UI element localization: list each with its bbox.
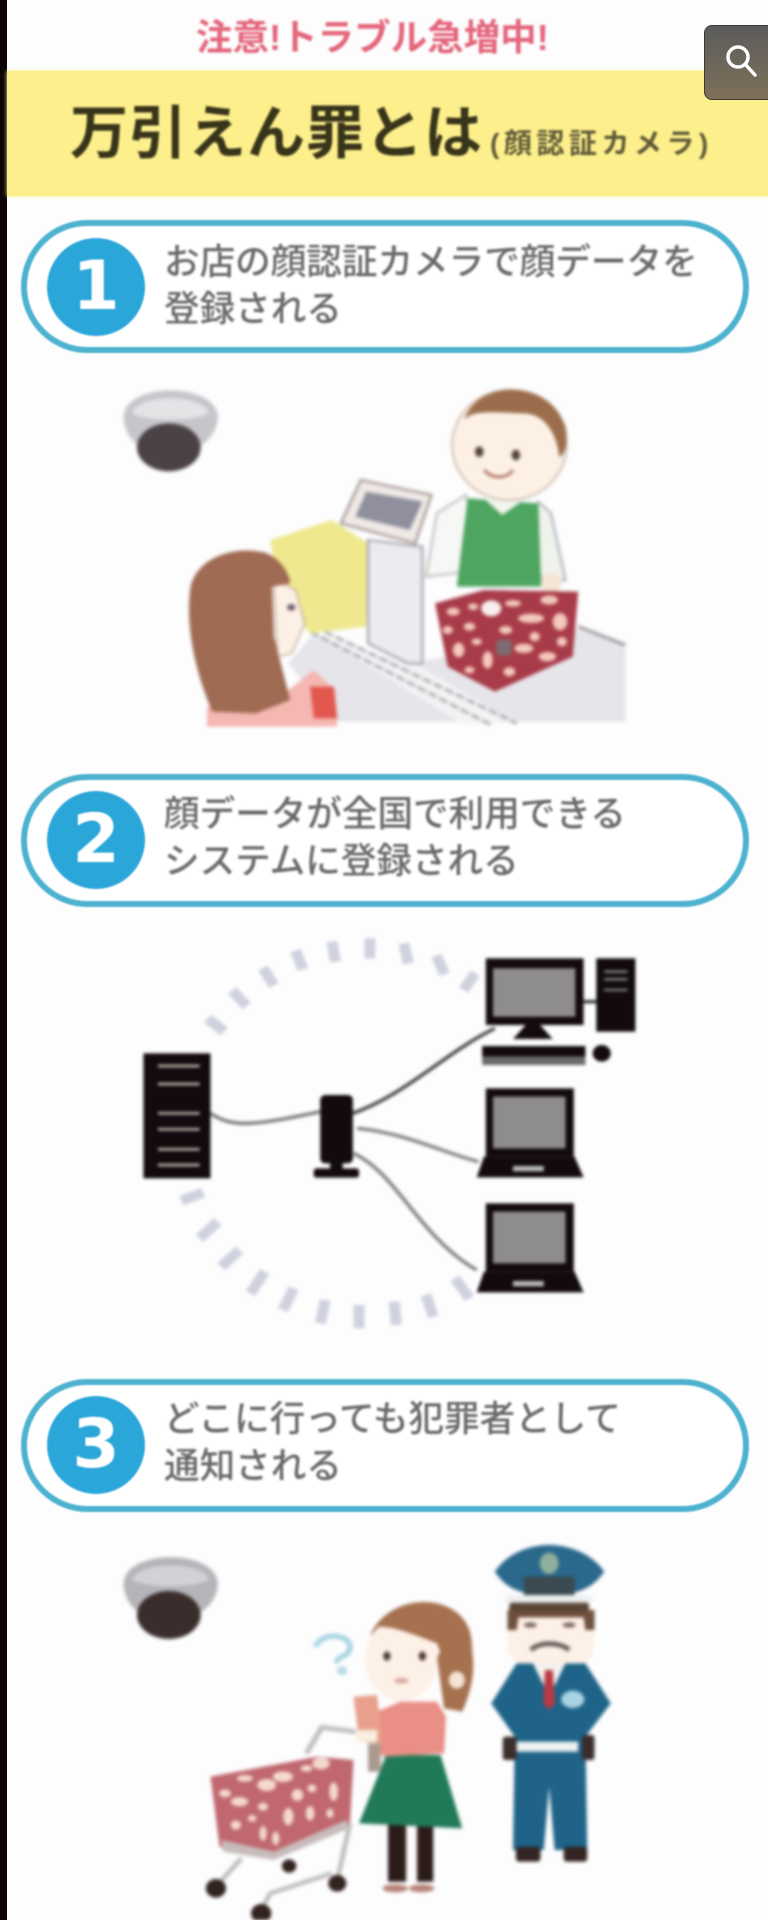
laptop top [477, 1088, 584, 1177]
red kicker heading: 注意!トラブル急増中! [196, 17, 549, 58]
question mark [316, 1636, 350, 1672]
icon: dome camera [124, 1557, 218, 1639]
number badge 3: 3 [72, 1405, 120, 1484]
step 3 pill [20, 1378, 750, 1513]
step 2 text: 顔データが全国で利用できる [164, 794, 626, 834]
step 3 text: 通知される [164, 1446, 342, 1486]
step 2 text: システムに登録される [164, 841, 519, 881]
network hub [314, 1095, 359, 1178]
icon: dome camera [124, 390, 218, 471]
server tower [143, 1053, 210, 1178]
number badge 2: 2 [72, 800, 120, 879]
checkout counter [288, 627, 625, 725]
step 1 text [164, 242, 698, 329]
scene 2: network of server, hub and computers [140, 937, 638, 1330]
shopping basket [435, 590, 578, 692]
cables [210, 1028, 495, 1270]
step 3 text [164, 1399, 621, 1486]
customer [189, 550, 337, 727]
title note: (顔認証カメラ) [490, 128, 713, 159]
number badge 1 [47, 238, 145, 336]
police officer [491, 1545, 611, 1862]
number badge 3 [47, 1396, 145, 1494]
step 1 text: お店の顔認証カメラで顔データを [164, 242, 698, 282]
shopping cart [206, 1727, 355, 1920]
step 2 pill [20, 773, 750, 908]
search button [704, 25, 768, 100]
yellow shopping bag [270, 520, 368, 633]
dashed data ring [182, 938, 475, 1328]
register terminal [341, 480, 431, 663]
step 3 text: どこに行っても犯罪者として [164, 1399, 621, 1439]
step 2 text [164, 794, 626, 881]
scene 3: camera, woman with cart, police officer [122, 1542, 613, 1920]
pill outline [21, 1379, 749, 1512]
woman [354, 1602, 473, 1892]
step 1 text: 登録される [164, 289, 342, 329]
left black edge [0, 0, 7, 1920]
laptop bottom [477, 1203, 584, 1292]
clerk [426, 390, 567, 593]
main title: 万引えん罪とは [70, 101, 483, 166]
desktop computer [482, 958, 635, 1065]
scene 1: dome camera, clerk and customer at register [122, 386, 628, 729]
pill outline [21, 774, 749, 907]
yellow title band [7, 71, 768, 196]
number badge 1: 1 [72, 247, 120, 326]
pill outline [21, 220, 749, 353]
step 1 pill [20, 219, 750, 354]
number badge 2 [47, 791, 145, 889]
icon: magnifier [726, 45, 757, 77]
